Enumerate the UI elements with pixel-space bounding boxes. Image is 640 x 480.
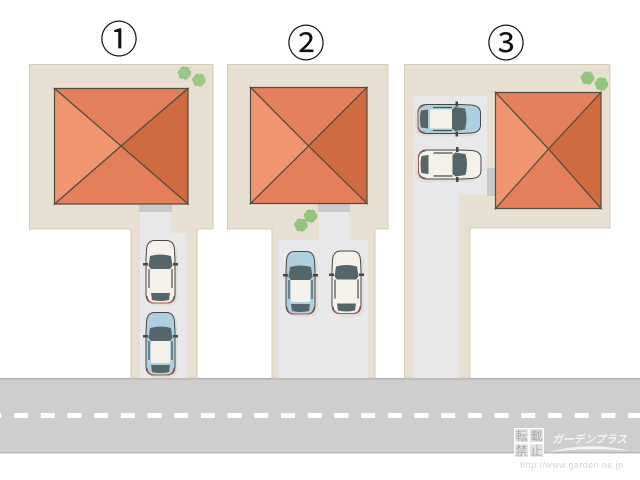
watermark brand name: ガーデンプラス (552, 433, 628, 446)
lot 2 roof (250, 88, 367, 204)
watermark stamp: 転 (515, 429, 528, 443)
lot 2 blue car (283, 252, 318, 317)
lot 3 entrance step (487, 168, 495, 196)
heading: number 3: ③ (487, 13, 525, 68)
lot 2 white car (329, 251, 364, 316)
panel: lot 3 (404, 64, 610, 378)
watermark (514, 428, 630, 470)
lot 1 entrance step (139, 205, 172, 212)
lot 3 white car (416, 147, 481, 182)
watermark stamp: 載 (530, 429, 543, 443)
road (0, 378, 640, 454)
heading: number 1: ① (100, 9, 138, 64)
panel: lot 2 (228, 64, 388, 378)
lot 1 shrubs (178, 67, 205, 86)
lot 2 ground (228, 64, 388, 378)
heading: number 2: ② (287, 13, 325, 68)
lot 2 driveway (278, 212, 368, 378)
watermark stamp: 止 (530, 444, 543, 458)
lot 2 entrance step (318, 204, 350, 212)
lot 3 ground (404, 64, 610, 378)
lot 2 shrubs (295, 210, 316, 231)
lot 1 ground (30, 64, 213, 378)
panel: lot 1 (30, 64, 213, 378)
lot 3 roof (496, 92, 601, 208)
watermark stamp: 禁 (515, 444, 528, 458)
watermark stamp (514, 428, 544, 458)
lot 3 blue car (415, 102, 480, 136)
lot 1 driveway (140, 212, 187, 378)
watermark url: http://www.garden.ne.jp (520, 460, 623, 470)
watermark swoosh (548, 446, 630, 452)
lot 1 white car (143, 240, 178, 306)
lot 1 blue car (143, 312, 178, 378)
lot 3 driveway (413, 96, 487, 378)
lot 3 shrubs (582, 72, 608, 90)
lot 1 roof (54, 88, 188, 204)
